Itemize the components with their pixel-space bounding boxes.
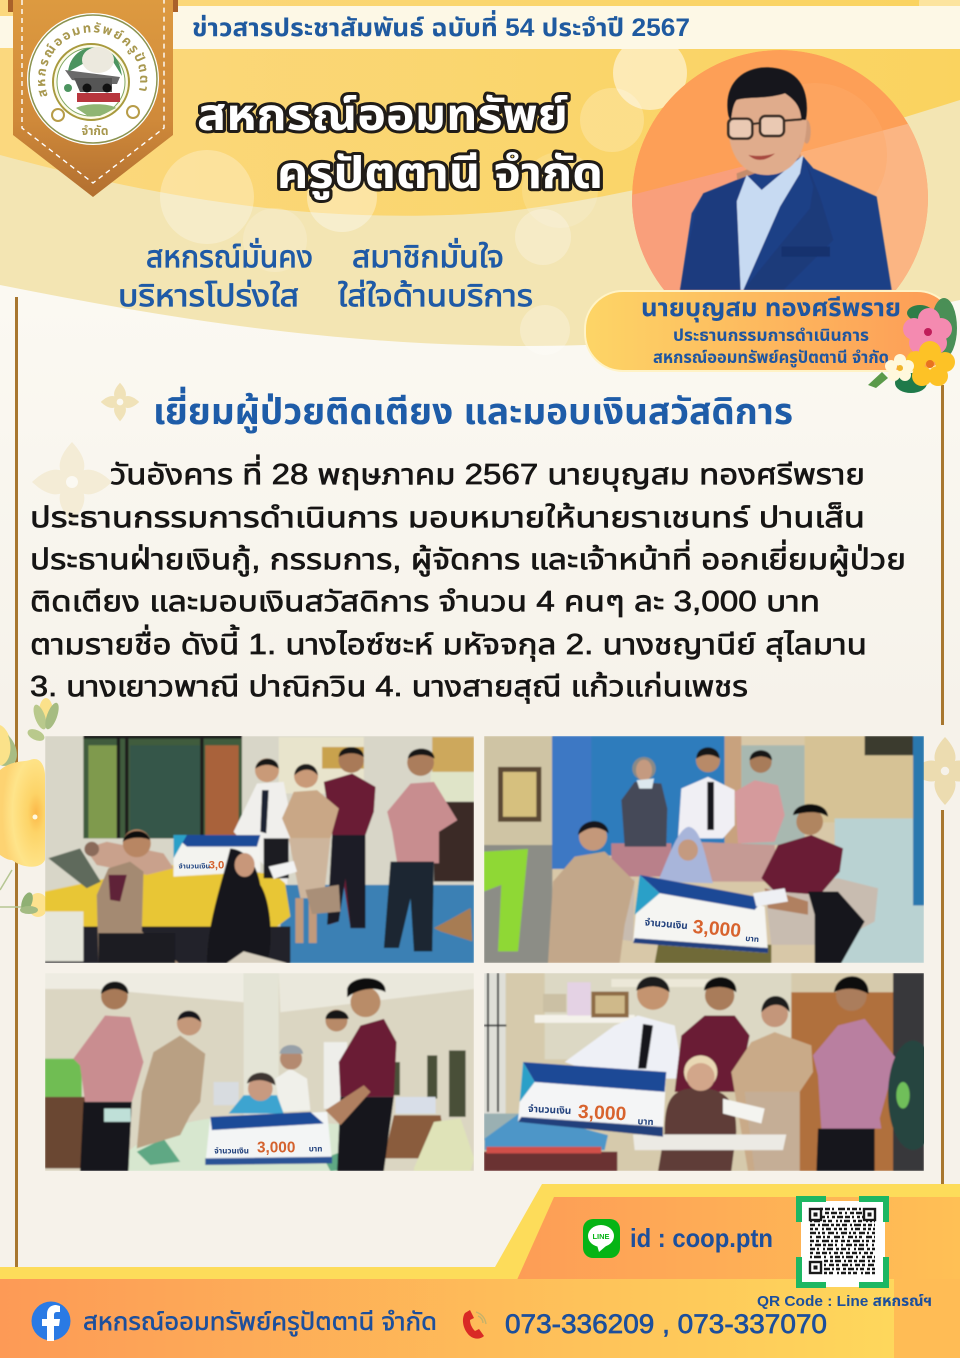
QR code xyxy=(799,1199,886,1287)
photo 2: จำนวนเงิน xyxy=(644,917,688,932)
photo 4: จำนวนเงิน xyxy=(528,1104,572,1117)
photo 3 xyxy=(45,973,474,1171)
header backdrop xyxy=(0,0,960,355)
portrait circle xyxy=(632,50,928,290)
body text: 3. นางเยาวพาณี ปาณิกวิน 4. นางสายสุณี แก้วแก่นเพชร xyxy=(30,671,748,703)
portrait of chairman xyxy=(680,67,892,290)
slogan: บริหารโปร่งใส xyxy=(118,280,299,313)
issue banner: ข่าวสารประชาสัมพันธ์ ฉบับที่ 54 ประจำปี 2567 xyxy=(192,10,690,42)
photo 1 xyxy=(45,736,474,963)
slogan xyxy=(118,238,533,313)
body text: ประธานกรรมการดำเนินการ มอบหมายให้นายราเชนทร์ ปานเส็น xyxy=(30,502,865,534)
phone numbers: 073-336209 , 073-337070 xyxy=(505,1309,827,1339)
icon: phone xyxy=(463,1310,486,1339)
slogan: ใส่ใจด้านบริการ xyxy=(338,280,533,313)
frame line right lower xyxy=(941,810,944,1185)
photo 4: 3,000 xyxy=(577,1102,627,1125)
photo 3: บาท xyxy=(309,1145,322,1154)
title: ครูปัตตานี จำกัด xyxy=(277,149,603,200)
body text: ตามรายชื่อ ดังนี้ 1. นางไอซ์ซะห์ มหัจจกุล 2. นางชญานีย์ สุไลมาน xyxy=(30,624,867,661)
photo 1: จำนวนเงิน xyxy=(179,861,211,870)
chairman name plate: นายบุญสม ทองศรีพราย xyxy=(641,294,901,323)
title xyxy=(197,91,603,200)
photo 2: บาท xyxy=(745,934,759,944)
heading: เยี่ยมผู้ป่วยติดเตียง และมอบเงินสวัสดิการ xyxy=(153,386,793,433)
issue banner xyxy=(0,6,960,49)
body text: ติดเตียง และมอบเงินสวัสดิการ จำนวน 4 คนๆ ละ 3,000 บาท xyxy=(30,586,820,618)
icon: body ornament xyxy=(32,442,112,522)
photo 3: จำนวนเงิน xyxy=(214,1146,249,1155)
photo 2: 3,000 xyxy=(692,917,742,942)
photo 4 xyxy=(484,973,924,1171)
logo ribbon xyxy=(8,0,178,197)
photo 1: 3,0 xyxy=(209,859,224,871)
facebook name: สหกรณ์ออมทรัพย์ครูปัตตานี จำกัด xyxy=(83,1308,437,1337)
photo 3: 3,000 xyxy=(257,1139,295,1156)
icon: heading ornament xyxy=(101,383,139,421)
body text: ประธานฝ่ายเงินกู้, กรรมการ, ผู้จัดการ และเจ้าหน้าที่ ออกเยี่ยมผู้ป่วย xyxy=(30,539,906,577)
line id: id : coop.ptn xyxy=(630,1223,773,1253)
frame line right xyxy=(941,385,944,725)
body text xyxy=(30,454,906,703)
chairman name plate: ประธานกรรมการดำเนินการ xyxy=(673,326,869,345)
body text: วันอังคาร ที่ 28 พฤษภาคม 2567 นายบุญสม ทองศรีพราย xyxy=(110,454,865,491)
frame line left xyxy=(15,297,18,1267)
title: สหกรณ์ออมทรัพย์ xyxy=(197,91,568,140)
chairman name plate xyxy=(585,291,955,371)
cooperative logo xyxy=(27,13,159,145)
footer bands xyxy=(0,1184,960,1358)
icon: left flower xyxy=(0,698,61,917)
icon: LINE: LINE xyxy=(592,1232,610,1241)
icon: Facebook xyxy=(32,1302,70,1341)
icon: LINE xyxy=(583,1219,620,1258)
icon: right ornament xyxy=(911,737,960,805)
cooperative logo: จำกัด xyxy=(81,124,109,138)
icon: flower bouquet xyxy=(868,298,957,393)
slogan: สมาชิกมั่นใจ xyxy=(352,238,504,274)
QR caption: QR Code : Line สหกรณ์ฯ xyxy=(757,1293,932,1310)
slogan: สหกรณ์มั่นคง xyxy=(146,238,313,274)
photo 2 xyxy=(484,736,924,963)
chairman name plate: สหกรณ์ออมทรัพย์ครูปัตตานี จำกัด xyxy=(653,348,889,368)
photo 4: บาท xyxy=(637,1116,654,1127)
